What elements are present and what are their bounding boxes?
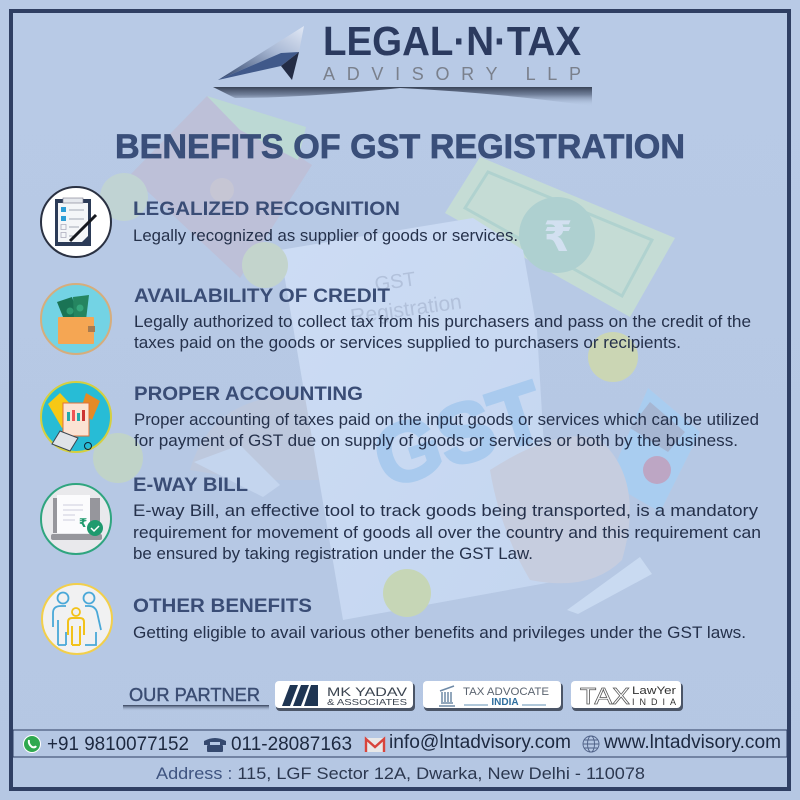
document ghost [280,218,552,620]
banknote ghost [445,157,675,317]
partner: Tax Lawyer India: INDIA [632,697,676,707]
partner label: OUR PARTNER [129,685,260,705]
icon: laptop with rupee bill: ₹ [79,516,87,530]
partner: Tax Lawyer India: LawYer [632,685,676,697]
right cuff ghost [567,557,652,614]
logo mark [218,26,304,80]
wallet ghost [130,96,312,278]
benefit 4: e-way bill [41,475,761,563]
icon: laptop with rupee bill [41,484,111,554]
description [134,410,759,450]
description [133,501,761,563]
logo wordmark: LEGAL·N·TAX [323,18,581,64]
description: Legally authorized to collect tax from his purchasers and pass on the credit of the [134,312,751,331]
icon: wallet with money [41,284,111,354]
description: Legally recognized as supplier of goods or services. [133,226,518,245]
left sleeve ghost [194,445,280,497]
left hand ghost [190,395,340,480]
logo underline shadow [213,87,592,106]
icon: telephone [204,738,226,752]
partner: Tax Lawyer India: TAX [580,683,630,709]
heading: E-WAY BILL [133,475,248,496]
icon: mail [365,738,385,752]
benefit 5: other benefits [42,584,746,654]
description: E-way Bill, an effective tool to track goods being transported, is a mandatory [133,501,759,520]
document label line 2: Registration [349,290,463,329]
description: requirement for movement of goods all over the country and this requirement can [133,523,761,542]
contact bar [13,730,787,757]
icon: clipboard [41,187,111,257]
description [134,312,751,352]
email: info@lntadvisory.com [389,732,571,753]
partner: Tax Lawyer India [571,681,683,711]
icon: accounting [41,382,111,452]
heading: LEGALIZED RECOGNITION [133,199,400,220]
phone ghost [608,388,700,512]
heading: AVAILABILITY OF CREDIT [134,286,390,307]
phone number: +91 9810077152 [47,734,189,755]
partner underline [123,705,269,711]
partner: Tax Advocate India [423,681,563,711]
heading: PROPER ACCOUNTING [134,384,363,405]
description: for payment of GST due on supply of goods or services or both by the business. [134,431,738,450]
right hand ghost [490,436,630,583]
partner: MK Yadav: & ASSOCIATES [327,697,407,707]
logo [213,18,592,106]
partner: Tax Advocate India: TAX ADVOCATE [463,686,549,698]
banknote ghost: ₹ [543,212,573,261]
benefit 2: availability of credit [41,284,751,354]
partner: Tax Advocate India: INDIA [491,697,519,708]
big GST lettering: GST [362,363,556,506]
description: Proper accounting of taxes paid on the input goods or services which can be utilized [134,410,759,429]
icon: globe [583,736,599,752]
benefit 3: proper accounting [41,382,759,452]
description: Getting eligible to avail various other benefits and privileges under the GST laws. [133,623,746,642]
icon: family [42,584,112,654]
background illustration: GST registration document, money and coins [93,96,700,620]
partner: MK Yadav [275,681,415,711]
website: www.lntadvisory.com [603,732,781,753]
logo subtitle: ADVISORY LLP [323,64,581,84]
benefit 1: legalized recognition [41,187,518,257]
description: taxes paid on the goods or services supplied to purchasers or recipients. [134,333,681,352]
partner: MK Yadav: MK YADAV [327,685,407,699]
description: be ensured by taking registration under the GST Law. [133,544,533,563]
heading: OTHER BENEFITS [133,596,312,617]
document label: GST [373,268,417,296]
landline number: 011-28087163 [231,734,352,755]
coins [93,173,638,617]
partners [123,681,683,711]
icon: whatsapp [24,736,40,752]
title: BENEFITS OF GST REGISTRATION [115,128,685,166]
address: Address : 115, LGF Sector 12A, Dwarka, New Delhi - 110078 [156,764,645,783]
